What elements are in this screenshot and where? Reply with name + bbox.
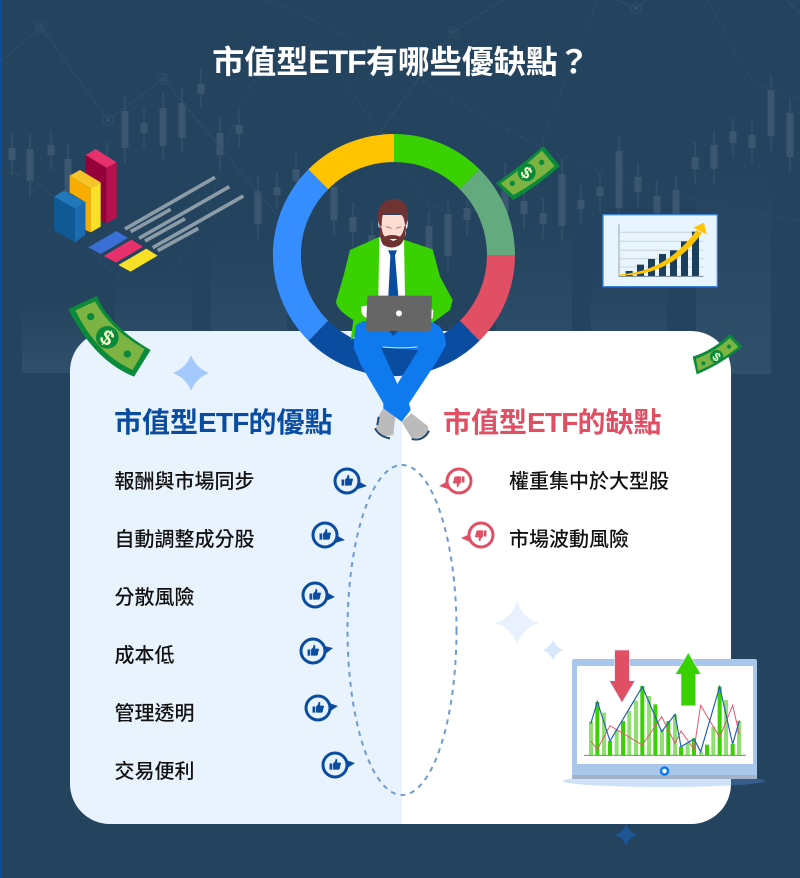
illustration: businessman with laptop — [336, 199, 453, 440]
list: advantages: 分散風險 — [114, 586, 194, 609]
arrow: down — [609, 650, 635, 703]
heading: advantages: 市值型ETF的優點 — [114, 407, 333, 438]
list: disadvantages: 權重集中於大型股 — [509, 470, 669, 493]
hands — [361, 305, 433, 320]
icon: money bill top right: $ — [517, 162, 537, 183]
list: advantages: 自動調整成分股 — [114, 528, 254, 551]
dashed ellipse — [348, 465, 456, 795]
list: advantages: 交易便利 — [114, 760, 194, 783]
list: disadvantages: 市場波動風險 — [509, 528, 629, 551]
decorative sparkles — [173, 355, 637, 846]
chart bars — [589, 696, 741, 755]
icon: money bill left: $ — [95, 325, 119, 351]
legs — [354, 321, 446, 422]
list: advantages: 成本低 — [114, 644, 174, 667]
list: advantages — [114, 470, 254, 783]
chart: donut ring — [287, 148, 501, 362]
icons: thumbs up — [301, 469, 367, 777]
shoes — [375, 408, 429, 440]
head — [378, 199, 408, 247]
list: advantages: 報酬與市場同步 — [114, 470, 254, 493]
jacket — [336, 237, 453, 340]
list: disadvantages — [509, 470, 669, 551]
icon: growth chart card — [603, 215, 717, 287]
illustration: monitor with market chart — [563, 650, 765, 787]
icon: money bill left — [68, 296, 151, 377]
panel: comparison card — [70, 331, 731, 824]
list: advantages: 管理透明 — [114, 702, 194, 725]
arrow: up — [675, 653, 701, 706]
icons: thumbs down — [439, 469, 493, 547]
icon: money bill right: $ — [709, 349, 724, 365]
icon: isometric bar chart — [54, 149, 243, 272]
tie — [388, 250, 398, 297]
shirt — [378, 237, 405, 297]
title: 市值型ETF有哪些優缺點？ — [212, 44, 590, 80]
heading: disadvantages: 市值型ETF的缺點 — [443, 407, 662, 438]
collar under laptop — [389, 331, 399, 336]
icon: money bill top right — [496, 146, 560, 200]
lap highlight — [383, 345, 417, 349]
laptop — [366, 296, 432, 331]
icon: money bill right — [693, 334, 742, 374]
